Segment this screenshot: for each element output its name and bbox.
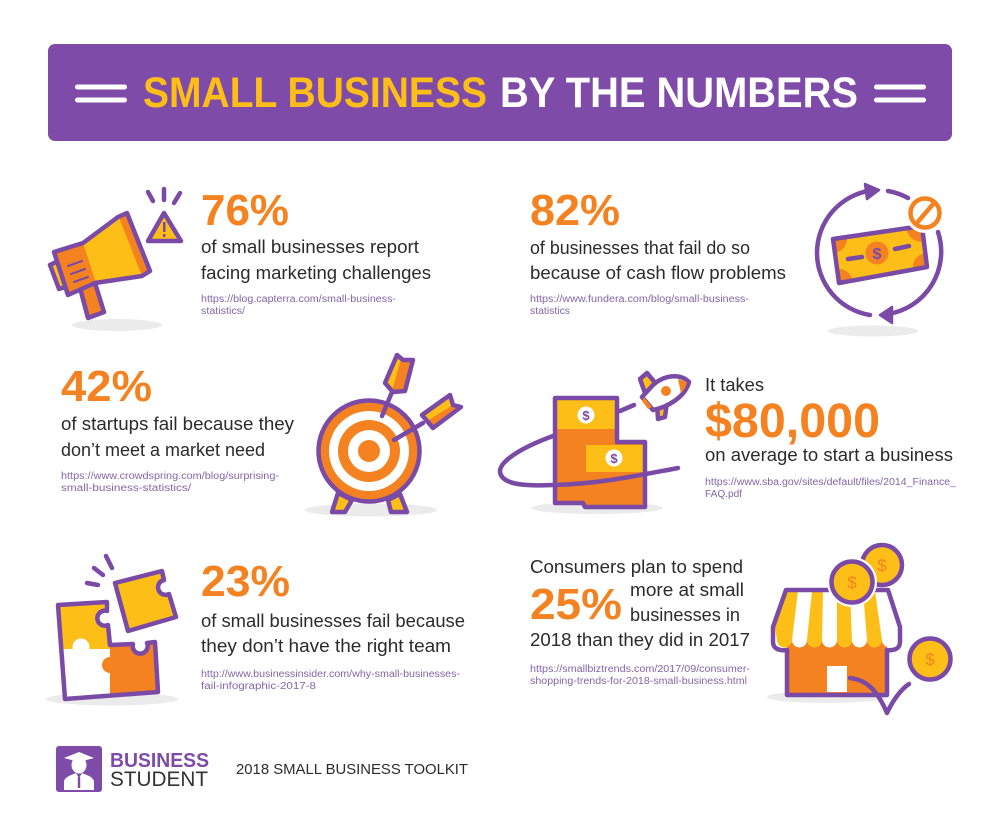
stat: 42% market need: don’t meet a market need bbox=[61, 440, 265, 460]
stat: 25% more at small businesses: 25% bbox=[530, 580, 622, 629]
stat: 82% cash flow: 82% bbox=[530, 186, 620, 235]
stat: 25% more at small businesses: https://smallbiztrends.com/2017/09/consumer- bbox=[530, 664, 750, 675]
stat: $80,000 to start a business: on average to start a business bbox=[705, 445, 953, 465]
stat: 25% more at small businesses: 2018 than they did in 2017 bbox=[530, 630, 750, 650]
stat: 82% cash flow: because of cash flow problems bbox=[530, 263, 786, 283]
icon: megaphone with warning bbox=[50, 189, 181, 331]
stat: 23% right team: of small businesses fail because bbox=[201, 611, 465, 631]
icon: money cycle: $ bbox=[873, 246, 882, 263]
stat: 82% cash flow: statistics bbox=[530, 306, 570, 317]
stat: 76% marketing challenges bbox=[201, 186, 431, 317]
stat: 25% more at small businesses: Consumers plan to spend bbox=[530, 557, 743, 577]
title banner: SMALL BUSINESS bbox=[143, 69, 487, 117]
logo: Business Student: BUSINESS bbox=[110, 750, 209, 772]
stat: 42% market need: 42% bbox=[61, 362, 152, 411]
stat: 25% more at small businesses: shopping-trends-for-2018-small-business.html bbox=[530, 676, 747, 687]
stat: 23% right team: http://www.businessinsider.com/why-small-businesses- bbox=[201, 669, 460, 680]
stat: 25% more at small businesses: more at small bbox=[630, 580, 744, 600]
icon: money stacks and rocket: $ bbox=[610, 451, 618, 466]
icon: storefront with coins bbox=[767, 545, 950, 713]
stat: 82% cash flow: https://www.fundera.com/blog/small-business- bbox=[530, 294, 749, 305]
icon: storefront with coins: $ bbox=[877, 556, 887, 575]
stat: 42% market need: https://www.crowdspring.com/blog/surprising- bbox=[61, 471, 279, 482]
stat: 25% more at small businesses: businesses in bbox=[630, 605, 740, 625]
stat: 23% right team: 23% bbox=[201, 557, 290, 606]
stat: 23% right team: fail-infographic-2017-8 bbox=[201, 681, 316, 692]
stat: 76% marketing challenges: statistics/ bbox=[201, 306, 245, 317]
stat: 76% marketing challenges: of small businesses report bbox=[201, 237, 419, 257]
footer label: 2018 SMALL BUSINESS TOOLKIT bbox=[236, 761, 468, 778]
icon: storefront with coins: $ bbox=[847, 573, 857, 592]
stat: $80,000 to start a business: https://www.sba.gov/sites/default/files/2014_Finance_ bbox=[705, 477, 956, 488]
stat: $80,000 to start a business: $80,000 bbox=[705, 395, 880, 448]
stat: 25% more at small businesses bbox=[530, 557, 750, 687]
stat: 82% cash flow: of businesses that fail do so bbox=[530, 238, 750, 258]
stat: 42% market need: of startups fail because they bbox=[61, 414, 294, 434]
logo: Business Student: STUDENT bbox=[110, 768, 208, 791]
stat: 76% marketing challenges: facing marketing challenges bbox=[201, 263, 431, 283]
stat: 82% cash flow bbox=[530, 186, 786, 317]
title banner bbox=[48, 44, 952, 141]
icon: target with arrows bbox=[305, 355, 461, 516]
icon: puzzle pieces bbox=[46, 556, 178, 706]
stat: $80,000 to start a business: It takes bbox=[705, 375, 764, 395]
stat: 76% marketing challenges: 76% bbox=[201, 186, 289, 235]
stat: 23% right team: they don’t have the right team bbox=[201, 636, 451, 656]
stat: 76% marketing challenges: https://blog.capterra.com/small-business- bbox=[201, 294, 396, 305]
stat: 42% market need bbox=[61, 362, 294, 494]
icon: money cycle bbox=[817, 184, 945, 336]
stat: $80,000 to start a business bbox=[705, 375, 956, 500]
awning bbox=[773, 590, 900, 650]
stat: 23% right team bbox=[201, 557, 465, 692]
icon: storefront with coins: $ bbox=[925, 650, 935, 669]
stat: 42% market need: small-business-statistics/ bbox=[61, 483, 191, 494]
icon: money stacks and rocket bbox=[500, 373, 689, 514]
logo: Business Student bbox=[56, 746, 209, 792]
stat: $80,000 to start a business: FAQ.pdf bbox=[705, 489, 742, 500]
title banner: BY THE NUMBERS bbox=[500, 69, 858, 117]
icon: money stacks and rocket: $ bbox=[582, 408, 590, 423]
